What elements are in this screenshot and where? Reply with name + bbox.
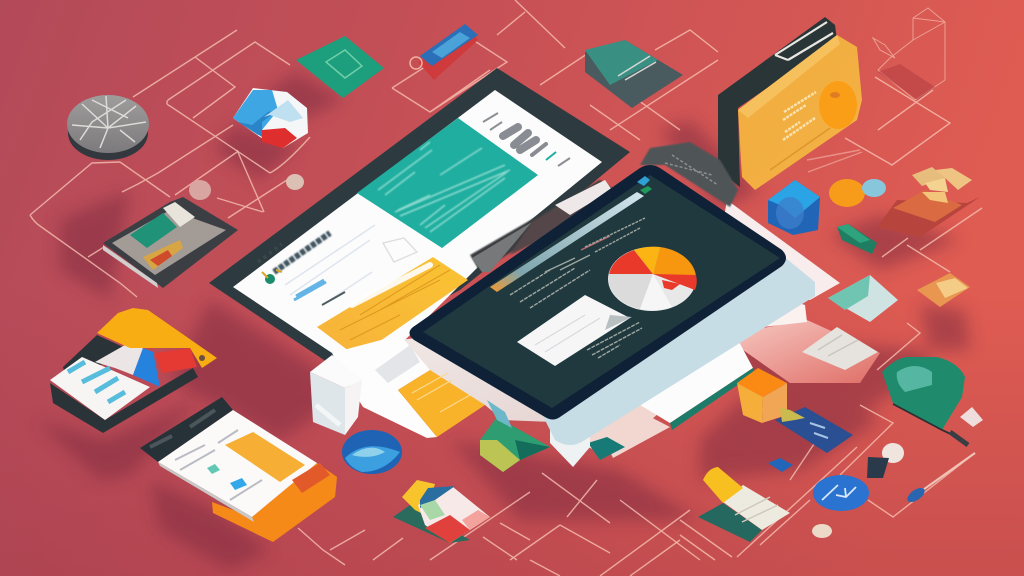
- yellow panel: [317, 257, 468, 357]
- white sheet and green edge: [640, 338, 753, 423]
- phone with orange base: [140, 397, 337, 542]
- back tablet: [209, 68, 630, 362]
- teal panel text lines: [378, 142, 510, 232]
- pale sheet: [400, 335, 620, 455]
- pink fading sheet: [733, 320, 880, 383]
- white fan slice: [95, 345, 143, 375]
- icon: green pill: [837, 224, 877, 254]
- teal panel: [357, 118, 538, 248]
- icon: blue card with red tag: [410, 24, 478, 80]
- tablet screen: [423, 175, 780, 408]
- soft shadows: [35, 72, 970, 570]
- phone header: [140, 397, 233, 462]
- white flap under tablet: [550, 423, 590, 467]
- red tag: [292, 463, 330, 493]
- icon: blue card: [775, 407, 853, 453]
- icon: light blue dot: [862, 179, 886, 197]
- small top text marks: [483, 113, 570, 166]
- orange fan slice: [97, 308, 217, 368]
- chart marks: [68, 362, 125, 402]
- icon: dark cup: [867, 457, 889, 478]
- heading scribble: [258, 233, 330, 284]
- tablet frame: [409, 165, 786, 420]
- icon: blue white red gem: [233, 88, 308, 148]
- icon: device with green panel: [103, 197, 238, 288]
- phone with colourful fan: [50, 308, 217, 433]
- top-left cluster: [120, 30, 290, 197]
- white paper edge right of front tablet: [720, 200, 840, 300]
- icon: green sticky note: [296, 36, 384, 98]
- screenshot card: [517, 295, 630, 366]
- papers right of front tablet: [570, 300, 880, 460]
- blue chart lines: [285, 225, 375, 305]
- phone screen: [158, 410, 317, 517]
- blue chip: [230, 478, 247, 490]
- orange base: [212, 463, 337, 542]
- pink sheet behind gap: [570, 385, 690, 452]
- phone body: [50, 368, 198, 433]
- text lines on screen: [510, 218, 645, 358]
- grey pills: [503, 127, 546, 155]
- icon: small blue chip: [768, 458, 793, 472]
- icon: green crystal: [480, 400, 550, 472]
- mini chart box: [383, 238, 417, 262]
- tablet light-blue base: [540, 255, 815, 445]
- icon: green leaf blob: [882, 357, 965, 437]
- red fan slice: [155, 348, 197, 373]
- top centre cluster: [392, 0, 596, 112]
- icon: orange cube: [737, 368, 787, 423]
- icon: teal note: [828, 275, 898, 322]
- icon: blue circle: [342, 430, 402, 474]
- pink flap: [600, 408, 670, 458]
- phone screen: [50, 357, 150, 420]
- colored header strip: [490, 192, 644, 292]
- lower-right cluster: [790, 323, 975, 517]
- white sheet: [332, 335, 437, 438]
- blue fan slice: [133, 348, 160, 387]
- icon: stone sphere: [67, 95, 149, 160]
- grey card: [802, 327, 878, 370]
- grey hinge behind front tablet: [640, 142, 738, 207]
- white papers under tablets: [310, 335, 620, 455]
- icon: dark stylus: [950, 432, 968, 445]
- grey scrap: [375, 345, 420, 383]
- icon: white card with yellow tab: [698, 467, 790, 542]
- icon: yellow wallet: [718, 17, 862, 190]
- icon: faded wire cube: [873, 8, 945, 100]
- front tablet: [409, 165, 815, 445]
- icon: white egg: [882, 443, 904, 463]
- icon: colourful shell: [393, 480, 490, 543]
- corner fold: [763, 300, 807, 327]
- icon: cylinders: [189, 174, 304, 200]
- icon: orange blob: [829, 179, 865, 207]
- orange card: [225, 432, 305, 482]
- yellow sheet: [398, 370, 485, 437]
- icon: gold blocks: [877, 167, 980, 237]
- icon: dark teal notebook: [585, 40, 683, 108]
- right cluster: [845, 77, 950, 165]
- tablet frame: [209, 68, 630, 362]
- icon: blue cube: [768, 180, 820, 235]
- teal flap: [588, 437, 625, 460]
- icon: blue pen: [905, 453, 975, 505]
- white box: [310, 355, 362, 435]
- picture strip behind front tablet: [470, 180, 612, 272]
- icon: gold tile: [917, 273, 970, 307]
- tablet screen: [233, 90, 602, 353]
- icon: blue circle badge: [813, 475, 869, 511]
- icon: small white box: [960, 407, 983, 427]
- pie chart: [608, 247, 697, 311]
- icon: white dot: [812, 524, 832, 538]
- bottom centre cluster: [430, 473, 700, 576]
